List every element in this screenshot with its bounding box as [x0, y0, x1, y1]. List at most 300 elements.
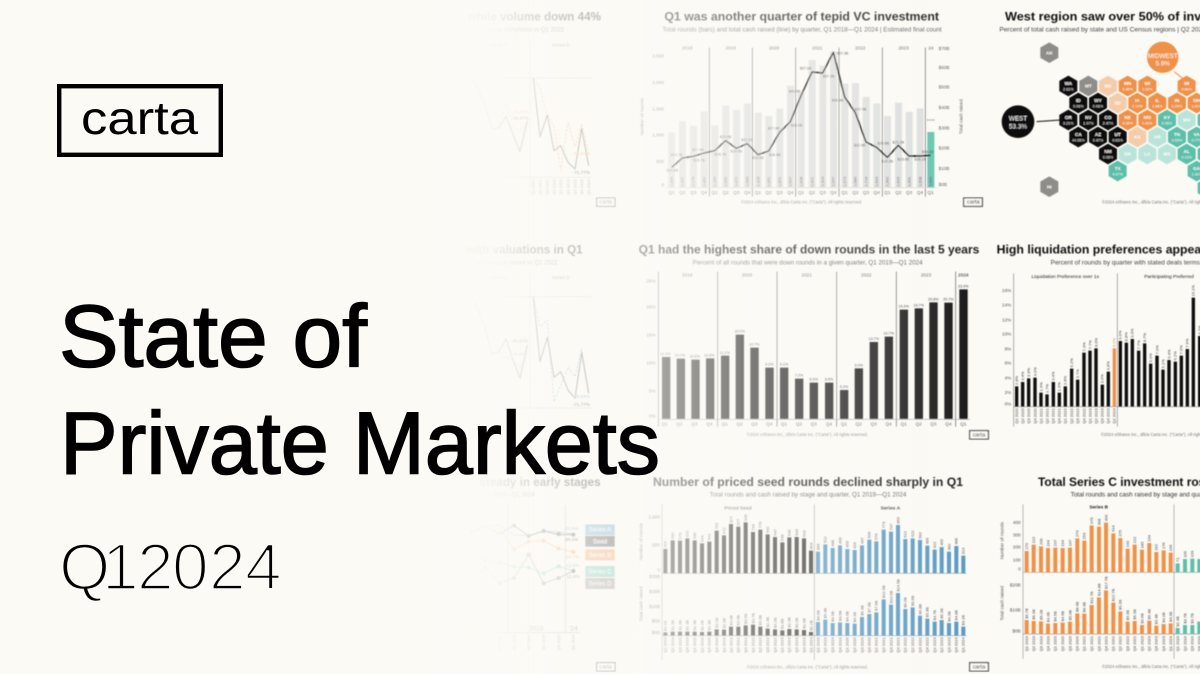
cash raised labels: $1.3B	[692, 620, 697, 630]
quarter labels: Q4 2022	[1081, 408, 1086, 424]
state labels: WA	[1065, 81, 1073, 86]
round count labels: 592	[917, 531, 922, 539]
series B round bars	[1025, 523, 1173, 572]
value labels: 9.2%	[765, 363, 774, 367]
quarter labels: Q1 2019	[1175, 635, 1180, 651]
state labels: TX	[1115, 166, 1122, 171]
round count labels: 612	[903, 530, 908, 538]
state labels: 0.63%	[1112, 138, 1124, 142]
y axis labels: $0B	[652, 630, 660, 635]
bar value labels: 1,267	[680, 176, 685, 187]
cash raised labels: $7.9B	[874, 600, 879, 611]
y axis labels: 0	[1018, 566, 1021, 571]
round count labels: 253	[1082, 532, 1087, 539]
round count labels: 314	[1111, 525, 1116, 532]
quarter labels: Q1 2020	[1014, 408, 1019, 424]
bar value labels: 1,064	[928, 176, 933, 187]
y axis labels: 100	[1013, 557, 1021, 562]
quarter labels: Q3 2020	[859, 637, 864, 653]
small carta logo: carta	[967, 200, 980, 206]
round count labels: 776	[758, 521, 763, 528]
line value labels: $46.5B	[789, 90, 801, 94]
state labels: 0.21%	[1063, 121, 1074, 125]
bar value labels: 6.2%	[1173, 351, 1178, 360]
panel headings: Series A	[880, 505, 901, 511]
bar value labels: 2.8%	[1014, 375, 1019, 385]
round count labels: 534	[699, 535, 704, 542]
chart: share by stage line chart, bottom left: Q3 2023	[541, 634, 546, 650]
chart: valuations line chart, middle left: -71.77%	[573, 402, 591, 407]
callout: midwest	[1147, 42, 1183, 78]
quarter labels: Q1	[884, 190, 891, 195]
y axis: 10%	[646, 360, 656, 365]
y axis labels	[638, 515, 660, 635]
y axis labels: $0B	[1012, 628, 1021, 633]
value labels: 19.4%	[898, 305, 910, 309]
round count labels: 180	[1139, 541, 1144, 548]
quarter labels: Q2	[723, 190, 729, 195]
quarter labels: Q3	[777, 190, 783, 195]
quarter labels: Q1 2022	[750, 637, 755, 653]
state labels: MT	[1085, 84, 1092, 89]
cash raised labels: $3.7B	[750, 613, 755, 623]
year labels: 2022	[861, 273, 872, 278]
quarter labels: Q2 2020	[1060, 635, 1065, 651]
map subtitle: Percent of total cash raised by state and US Census regions | Q2 2023	[999, 27, 1200, 33]
value labels: 20.7%	[943, 298, 954, 302]
chart: deal volume line chart, top left: -36.47%	[511, 115, 530, 120]
state labels: 0.06%	[1073, 104, 1084, 108]
chart: valuations line chart, middle left: Series C	[490, 275, 509, 280]
callout: midwest: 5.9%	[1155, 61, 1170, 68]
quarter labels: Q3 2021	[736, 637, 741, 653]
value labels: 9.1%	[780, 363, 789, 367]
year labels: 24	[928, 46, 934, 51]
bar value labels: 3.7%	[1075, 369, 1080, 378]
state labels: 0.10%	[1132, 104, 1143, 108]
small carta logo	[970, 663, 988, 671]
bar value labels: 3.4%	[1051, 371, 1056, 381]
low value south hexes	[1119, 110, 1196, 164]
state labels: KY	[1164, 115, 1171, 120]
bar value labels	[1014, 285, 1200, 393]
cash raised labels: $5.3B	[939, 608, 944, 619]
series B cash bars	[1025, 590, 1173, 634]
bar value labels: 1,452	[701, 176, 706, 187]
bar value labels: 3.0%	[1100, 374, 1105, 383]
quarter labels: Q1	[722, 421, 728, 426]
round count labels: 827	[736, 518, 741, 525]
value labels: 19.7%	[913, 303, 925, 307]
round count labels	[663, 514, 966, 554]
chart: share by stage line chart, bottom left: Q4 2023	[556, 634, 561, 650]
cash raised labels: $8.4B	[1075, 601, 1080, 612]
state labels: 1.68%	[1152, 104, 1163, 108]
chart: deal volume line chart, top left: Q2 2022	[538, 179, 543, 195]
left axis: 1,500	[652, 106, 664, 111]
left axis	[640, 53, 664, 187]
cash raised labels: $5.0B	[1067, 610, 1072, 620]
bar value labels: 4.8%	[1106, 361, 1111, 370]
round count labels: 422	[932, 541, 937, 548]
small carta logo	[970, 431, 988, 439]
bar value labels: 3.4%	[1020, 371, 1025, 381]
line value labels: $23.6B	[720, 135, 732, 139]
state labels: NM	[1104, 149, 1112, 154]
bar value labels: 1,362	[885, 176, 890, 187]
chart: deal volume line chart, top left: -78.25%	[511, 109, 530, 114]
state labels: 0.25%	[1172, 104, 1183, 108]
quarter labels: Q3 2023	[1100, 408, 1105, 424]
cash raised labels: $9.0B	[903, 597, 908, 608]
y axis labels	[1002, 288, 1011, 406]
state labels: 0.47%	[1093, 138, 1104, 142]
value labels: 10.7%	[675, 354, 686, 358]
chart: share by stage line chart, bottom left	[470, 476, 615, 671]
small carta logo	[964, 198, 982, 206]
round count labels: 622	[685, 530, 690, 537]
round count labels: 488	[954, 537, 959, 545]
year labels: 2021	[801, 273, 812, 278]
quarter labels: Q1	[669, 190, 675, 195]
bar value labels: 7.9%	[1185, 338, 1190, 348]
quarter labels: Q1 2021	[874, 637, 879, 653]
value labels: 7.2%	[795, 374, 804, 378]
chart: series B and C bars, bottom right	[999, 476, 1200, 669]
chart: hexagon map of cash raised by state, top right	[999, 10, 1200, 204]
value labels: 15.0%	[734, 330, 746, 334]
round count labels: 877	[728, 515, 733, 523]
line value labels: $67.3B	[837, 52, 849, 56]
state labels: ND	[1105, 84, 1112, 89]
state labels: WV	[1183, 118, 1191, 123]
state labels: OK	[1124, 152, 1132, 157]
bar value labels: 3.9%	[1026, 367, 1031, 377]
panel headings	[724, 505, 901, 511]
quarter labels: Q2 2019	[670, 637, 675, 653]
quarter labels: Q2 2021	[728, 637, 733, 653]
cash raised labels: $12.7B	[1111, 588, 1116, 601]
bar value labels: 7.0%	[1179, 345, 1184, 354]
quarter labels: Q1 2020	[692, 637, 697, 653]
bar value labels: 6.4%	[1166, 349, 1171, 359]
black bars	[1015, 298, 1200, 407]
y axis: 20%	[646, 304, 656, 309]
cash raised labels: $3.7B	[1182, 613, 1187, 624]
quarter labels: Q3 2021	[1051, 408, 1056, 424]
state labels: 0.86%	[1181, 87, 1193, 91]
bar value labels: 8.0%	[1093, 337, 1098, 347]
quarter labels: Q2 2021	[1089, 635, 1094, 651]
cash raised labels	[1024, 576, 1195, 627]
panel headings: Participating Preferred	[1144, 274, 1194, 280]
chart: deal volume line chart, top left: Q1 2024	[586, 179, 591, 195]
quarter labels: Q2	[679, 190, 686, 195]
bar value labels: 5.1%	[1160, 359, 1165, 368]
state labels: AL	[1184, 149, 1190, 154]
state labels: UT	[1115, 132, 1121, 137]
bar value labels: 1,472	[734, 176, 739, 187]
round count labels: 416	[852, 541, 857, 549]
round count labels: 170	[1024, 542, 1029, 550]
quarter labels: Q1 2024	[961, 637, 966, 653]
seed round bars	[663, 522, 813, 573]
chart title: Q1 had the highest share of down rounds in the last 5 years	[639, 243, 979, 256]
value labels: 10.8%	[704, 353, 715, 357]
logo: carta: carta	[81, 92, 198, 144]
quarter labels: Q4 2023	[1106, 408, 1111, 424]
y axis labels: Number of rounds	[999, 521, 1004, 559]
chart: share by stage line chart, bottom left: carta	[599, 664, 613, 670]
quarter labels: Q4 2022	[925, 637, 930, 653]
round count labels: 733	[750, 523, 755, 531]
line value labels: $14.7B	[671, 153, 683, 157]
quarter labels: Q3	[906, 190, 913, 195]
rounds bars	[668, 52, 924, 188]
cash raised labels: $1.9B	[801, 618, 806, 629]
y axis labels: Number of rounds	[638, 522, 643, 560]
cash raised labels: $5.7B	[1024, 608, 1029, 619]
round count labels: 905	[743, 514, 748, 521]
chart: share by stage line chart, bottom left: 12.6%	[567, 574, 581, 579]
chart: valuations line chart, middle left: -68.59%	[573, 394, 591, 399]
y axis labels: 300	[1013, 532, 1021, 537]
quarter labels: Q4	[874, 190, 880, 195]
line value labels: $15.7B	[693, 159, 705, 163]
title: State of Private Markets	[59, 286, 660, 492]
right axis: $60B	[939, 65, 950, 70]
cash raised labels: $3.5B	[743, 613, 748, 624]
bar value labels: 8.0%	[1112, 337, 1117, 347]
state labels: 2.61%	[1063, 87, 1074, 91]
quarter labels: Q2 2023	[1093, 408, 1098, 424]
round count labels: 197	[1053, 539, 1058, 546]
midwest hexes	[1119, 76, 1200, 130]
quarter labels: Q4	[886, 421, 892, 426]
quarter labels: Q2	[676, 421, 683, 426]
chart: deal volume line chart, top left: Q1 2023	[558, 179, 563, 195]
round count labels: 433	[845, 540, 850, 548]
quarter labels: Q3 2019	[1190, 635, 1195, 651]
cash raised labels: $11.7B	[1089, 591, 1094, 604]
bar value labels: 1,361	[766, 176, 771, 187]
chart: deal volume line chart, top left: while volume down 44%	[467, 10, 602, 23]
line value labels: $16.1B	[915, 158, 927, 162]
cash raised labels: $10.5B	[888, 590, 893, 603]
value labels: 6.5%	[809, 378, 819, 382]
quarter labels: Q1 2023	[1139, 635, 1144, 651]
chart: valuations line chart, middle left: median cash raised vs Q1 2022	[473, 260, 558, 266]
chart: valuations line chart, middle left: Series D	[552, 275, 570, 280]
y axis labels: 14%	[1002, 303, 1011, 308]
bar value labels: 2.8%	[1063, 375, 1068, 385]
quarter labels	[662, 421, 967, 426]
quarter labels: Q1 2022	[1111, 635, 1116, 651]
chart subtitle: Total rounds (bars) and total cash raised (line) by quarter, Q1 2018—Q1 2024 | Estimated final count	[662, 27, 942, 33]
y axis labels: 8%	[1005, 346, 1011, 351]
quarter labels: Q2 2023	[787, 637, 792, 653]
chart: valuations line chart, middle left: -36.47%	[511, 339, 529, 344]
y axis labels	[999, 520, 1021, 633]
cash raised labels: $1.2B	[699, 620, 704, 631]
line value labels: $16.9B	[752, 156, 764, 160]
y axis labels: 1,000	[648, 515, 660, 520]
round count labels: 194	[1060, 539, 1065, 547]
round count labels	[1024, 514, 1195, 562]
left axis: 2,500	[652, 53, 664, 58]
quarter labels: Q1 2020	[1053, 635, 1058, 651]
round count labels: 313	[961, 547, 966, 554]
state labels: TN	[1174, 132, 1181, 137]
year labels	[682, 273, 969, 278]
state labels: 4.47%	[1112, 172, 1124, 176]
bar value labels: 4.0%	[1032, 367, 1037, 376]
bar value labels: 1,184	[712, 176, 717, 187]
round count labels: 190	[1125, 540, 1130, 547]
state labels: HI	[1047, 184, 1052, 189]
value labels: 13.7%	[868, 337, 880, 341]
round count labels: 274	[1075, 530, 1080, 537]
quarter labels: Q2 2023	[939, 637, 944, 653]
quarter labels: Q4 2020	[714, 637, 719, 653]
left axis: 0	[661, 182, 664, 187]
cash raised labels: $2.4B	[765, 617, 770, 627]
chart: share by stage line chart, bottom left: 16.7%	[566, 554, 580, 559]
round count labels: 497	[859, 537, 864, 544]
quarter labels: Q3	[690, 190, 697, 195]
round count labels: 448	[830, 539, 835, 547]
cash raised labels: $17.7B	[1103, 576, 1108, 589]
state labels: 0.20%	[1142, 121, 1153, 125]
quarter labels: Q4	[706, 421, 713, 426]
state labels: AK	[1046, 50, 1053, 55]
highlighted Q1 2024 bar	[927, 132, 934, 188]
round count labels: 642	[787, 529, 792, 536]
value labels	[660, 284, 969, 389]
year labels	[682, 46, 934, 51]
quarter labels: Q2	[796, 421, 803, 426]
quarter labels: Q1 2021	[1082, 635, 1087, 651]
callout: west	[1002, 105, 1061, 138]
chart: share by stage line chart, bottom left: Series B	[589, 553, 611, 559]
bar value labels: 1.7%	[1044, 383, 1049, 393]
state labels: ID	[1076, 98, 1081, 103]
chart subtitle: Percent of all rounds that were down rounds in a given quarter, Q1 2019—Q1 2024	[693, 260, 923, 266]
line value labels: $22.9B	[854, 144, 866, 148]
cash raised labels: $1.8B	[780, 618, 785, 629]
line value labels: $21.2B	[893, 140, 905, 144]
round count labels: 737	[888, 523, 893, 530]
quarter labels: Q1	[842, 190, 848, 195]
quarter labels: Q2 2021	[881, 637, 886, 653]
quarter labels: Q4	[830, 190, 837, 195]
chart: share by stage line chart, bottom left: Q3 2022	[482, 634, 487, 650]
quarter labels: Q1	[960, 421, 967, 426]
down round bars	[662, 289, 968, 419]
line value labels: $17.4B	[692, 148, 704, 152]
quarter labels: Q3	[930, 421, 937, 426]
left axis: Number of rounds	[640, 97, 645, 135]
value labels: 14.7%	[883, 332, 895, 336]
chart subtitle: Total rounds and cash raised by stage and quarter, Q1 2019—Q1 2024	[710, 493, 907, 499]
round count labels: 234	[1147, 534, 1152, 542]
quarter labels: Q1	[798, 190, 805, 195]
right axis: $70B	[939, 46, 950, 51]
year labels: 2019	[682, 273, 693, 278]
y axis labels: Total cash raised	[638, 586, 643, 621]
round count labels: 562	[707, 533, 712, 540]
cash raised labels	[663, 579, 966, 631]
round count labels: 156	[1168, 544, 1173, 551]
round count labels: 465	[939, 538, 944, 546]
cash raised labels: $2.4B	[1175, 616, 1180, 627]
cash raised labels: $4.8B	[954, 610, 959, 620]
state labels: 0.08%	[1103, 155, 1114, 159]
chart: deal volume line chart, top left: Q1 2022	[531, 179, 536, 195]
callout: west: WEST	[1009, 116, 1027, 123]
small carta logo: carta	[973, 432, 986, 438]
bar value labels: 2,324	[820, 176, 825, 187]
state labels: 0.05%	[1122, 121, 1134, 125]
round count labels: 596	[867, 531, 872, 538]
quarter labels: Q1	[755, 190, 762, 195]
cash raised labels: $4.2B	[1045, 612, 1050, 622]
title: State of Private Markets: State of	[59, 286, 368, 386]
cash raised labels: $5.4B	[1147, 609, 1152, 619]
round count labels: 859	[895, 516, 900, 524]
cash raised labels: $2.2B	[794, 617, 799, 628]
y axis labels: 10%	[1002, 332, 1011, 337]
value labels: 11.1%	[660, 352, 671, 356]
quarter labels: Q1	[781, 421, 788, 426]
small carta logo: carta	[973, 665, 986, 671]
quarter labels: Q4 2022	[1132, 635, 1137, 651]
cash raised labels: $3.6B	[1139, 613, 1144, 624]
cash raised labels: $5.0B	[1125, 610, 1130, 620]
bar value labels: 8.7%	[1142, 332, 1147, 342]
chart: deal volume line chart, top left: Series D	[552, 43, 570, 48]
state labels: IL	[1155, 98, 1160, 103]
value labels: 6.5%	[825, 378, 834, 382]
cash raised labels: $2.3B	[787, 617, 792, 628]
round count labels: 622	[910, 530, 915, 537]
state labels: 0.53%	[1172, 138, 1183, 142]
bar value labels: 1,604	[874, 176, 879, 187]
chart subtitle: Total rounds and cash raised by stage and quarter	[1071, 493, 1200, 499]
cash raised labels: $6.8B	[917, 604, 922, 614]
year labels: 2018	[682, 46, 693, 51]
cash raised labels: $4.1B	[852, 612, 857, 622]
chart: deal volume line chart, top left: Q3 2023	[572, 179, 577, 195]
chart: valuations line chart, middle left: -48.29%	[511, 351, 529, 356]
bar value labels: 1,589	[745, 176, 750, 187]
y axis labels: $20B	[649, 574, 660, 579]
cash raised labels: $3.4B	[1154, 614, 1159, 624]
cash raised labels: $3.0B	[736, 615, 741, 625]
line value labels: $27.9B	[768, 127, 780, 131]
west hexes	[1059, 76, 1127, 164]
year labels: 2024	[958, 273, 969, 278]
chart: share by stage line chart, bottom left: 12.9%	[566, 563, 580, 568]
chart: share by stage line chart, bottom left: 2023	[529, 626, 544, 633]
cash raised labels: $4.0B	[1161, 612, 1166, 623]
y axis: 5%	[649, 389, 656, 394]
cash raised labels: $1.1B	[663, 620, 668, 631]
value labels: 9.0%	[854, 363, 864, 367]
quarter labels: Q4	[826, 421, 833, 426]
quarter labels: Q2	[766, 190, 772, 195]
quarter labels: Q3 2022	[1125, 635, 1130, 651]
